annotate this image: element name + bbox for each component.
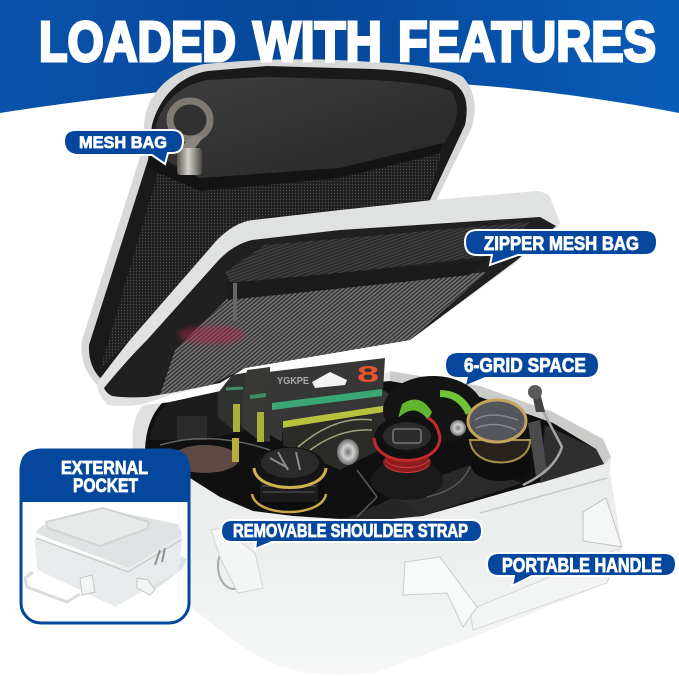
D-ring strap tab <box>211 528 263 593</box>
bag lower body <box>132 371 622 675</box>
thumbnail body <box>36 537 181 605</box>
metal clasp <box>177 148 202 175</box>
back box <box>218 372 250 430</box>
lid outer rim <box>81 59 475 385</box>
fishing reels <box>252 376 562 517</box>
fabric insert <box>177 416 207 440</box>
callout: mesh bag <box>64 130 183 164</box>
second lid inner <box>104 217 556 398</box>
zipper band <box>228 273 472 300</box>
callout: removable shoulder strap <box>221 520 482 549</box>
box white mark <box>312 372 347 388</box>
thumbnail zipper seam <box>36 538 181 572</box>
panel header <box>20 449 190 502</box>
front box <box>267 358 402 442</box>
green line spool <box>383 376 483 444</box>
metal ring <box>170 101 210 152</box>
label disc <box>171 445 239 473</box>
callout: zipper mesh bag <box>465 230 657 265</box>
silver knobs <box>337 420 466 465</box>
thumbnail handle <box>150 557 184 590</box>
left handle tab <box>403 557 477 627</box>
back rim <box>390 371 611 465</box>
stitched seam <box>480 478 607 513</box>
panel heading: POCKET <box>73 476 138 497</box>
box number: 8 <box>357 361 379 387</box>
title <box>39 10 656 74</box>
thumbnail strap <box>25 572 80 602</box>
thumbnail bag <box>25 508 184 605</box>
panel heading <box>61 458 148 497</box>
callout: 6-grid space <box>446 353 598 385</box>
middle box <box>242 367 270 442</box>
thumbnail lid <box>38 510 180 566</box>
second lid rim <box>97 191 560 406</box>
upper lid <box>81 59 475 385</box>
header banner <box>0 0 679 113</box>
green strip <box>272 389 382 410</box>
upper mesh <box>225 222 530 285</box>
braid spool face <box>283 410 402 470</box>
divider <box>388 465 522 516</box>
zipper mesh lid <box>97 191 570 410</box>
pocket elastic band <box>148 143 443 191</box>
reel: red centre <box>371 416 443 500</box>
left wall fabric <box>150 390 250 440</box>
callout: mesh bag: MESH BAG <box>79 134 167 152</box>
interior black <box>145 381 604 519</box>
mesh pocket <box>100 148 443 370</box>
box logo: YGKPE <box>277 376 309 387</box>
yellow band <box>283 403 402 428</box>
right handle tab <box>583 498 622 547</box>
rear wall right fabric <box>540 425 604 483</box>
callout: portable handle <box>487 553 676 586</box>
zipper pull <box>233 283 237 321</box>
padded upper panel <box>155 77 457 178</box>
thumbnail zipper <box>155 548 165 565</box>
divider lower <box>345 497 423 521</box>
panel heading: EXTERNAL <box>61 458 148 478</box>
panel frame <box>21 450 189 623</box>
callout: removable shoulder strap: REMOVABLE SHOULDER STRAP <box>233 521 468 541</box>
thumbnail pocket <box>46 508 149 546</box>
lid inner dark <box>89 66 467 378</box>
panel: external pocket <box>20 449 190 623</box>
thumbnail strap tabs <box>80 575 155 595</box>
mesh red tint <box>178 326 246 344</box>
callout: zipper mesh bag: ZIPPER MESH BAG <box>484 234 639 255</box>
title: LOADED <box>39 10 236 74</box>
title: WITH <box>253 10 382 74</box>
lower mesh <box>160 272 487 395</box>
reel arms <box>357 467 470 517</box>
reel: gold left <box>252 447 326 512</box>
handle band <box>470 548 620 630</box>
callout: 6-grid space: 6-GRID SPACE <box>464 355 586 377</box>
left rim <box>132 403 162 450</box>
reflection line <box>160 439 270 450</box>
bag white exterior <box>133 372 622 675</box>
line spool boxes <box>171 358 402 473</box>
portable handle <box>403 498 622 630</box>
reel: silver right <box>468 385 562 485</box>
